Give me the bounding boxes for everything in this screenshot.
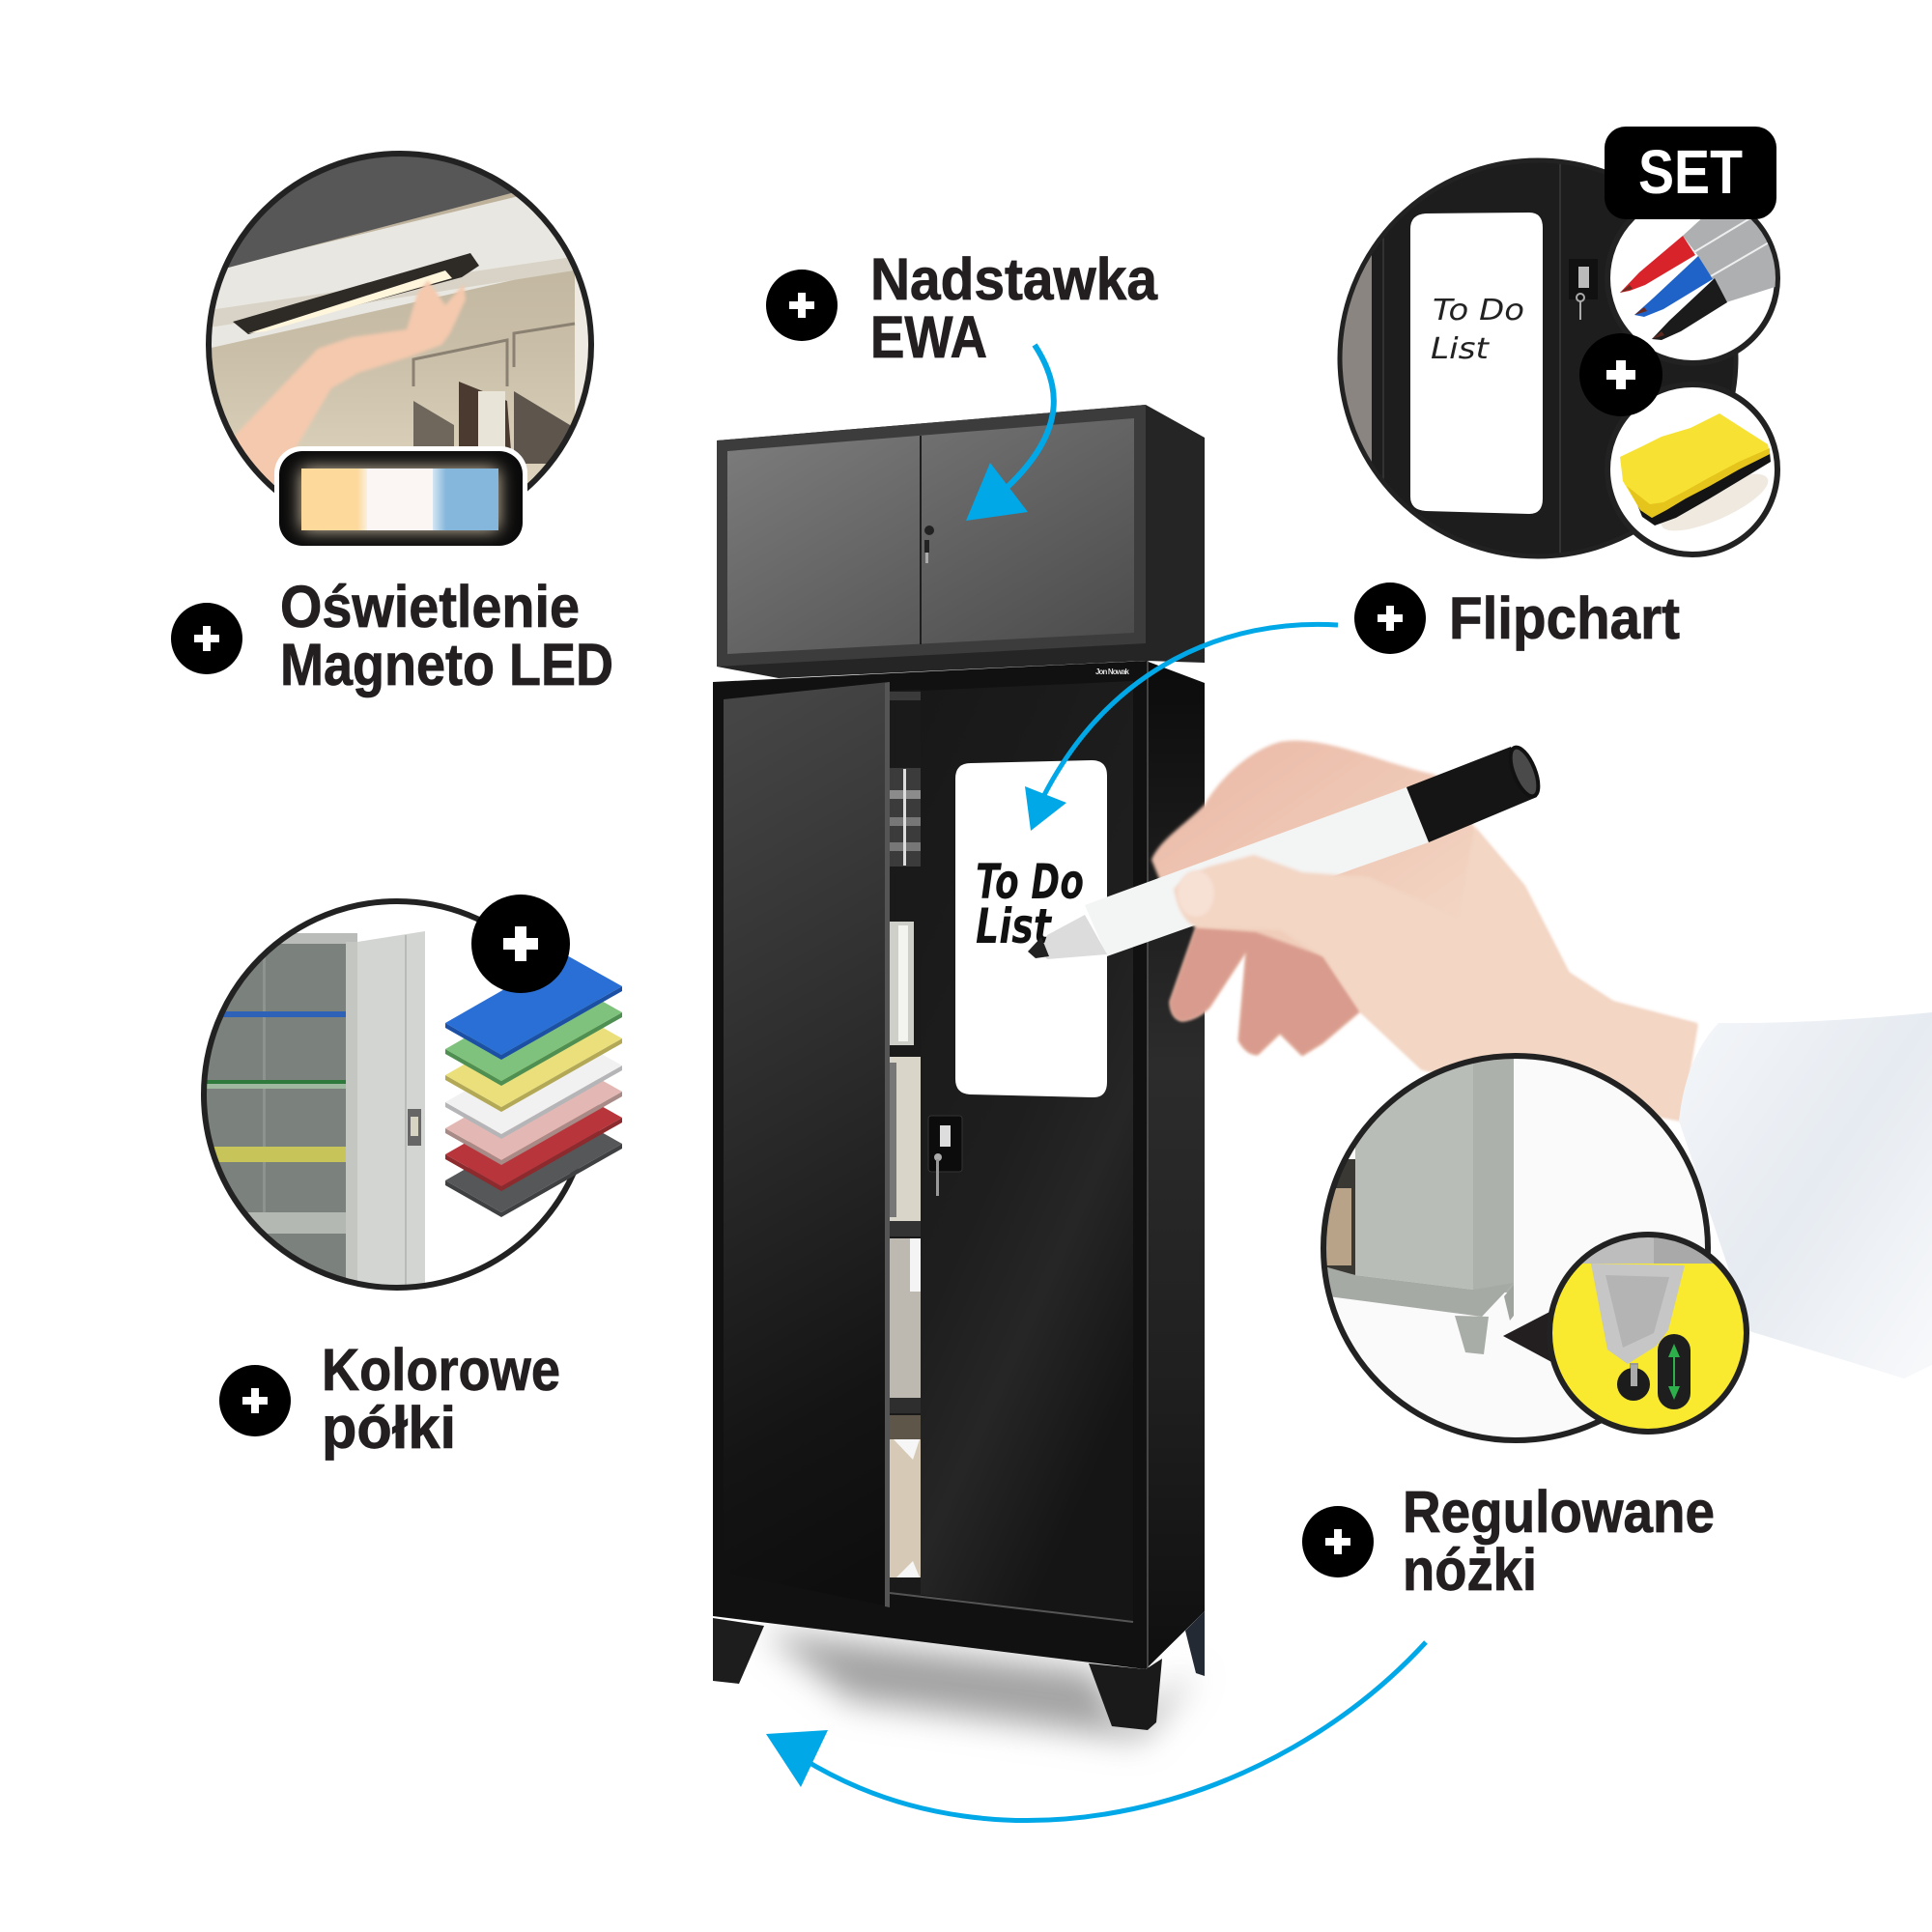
brand mark: Jon Nowak bbox=[1095, 668, 1130, 676]
colour temperature badge bbox=[274, 446, 527, 551]
SET badge: SET bbox=[1638, 137, 1743, 207]
label: coloured shelves bbox=[219, 1337, 560, 1461]
upper door divider bbox=[920, 436, 922, 644]
door lock bbox=[928, 1116, 962, 1196]
cabinet photo bbox=[198, 931, 425, 1294]
plus icon bbox=[1579, 333, 1662, 416]
mini whiteboard text: To Do bbox=[1433, 294, 1524, 327]
shelves circle outline bbox=[204, 901, 590, 1288]
hand with marker bbox=[1028, 741, 1697, 1121]
label text: Flipchart bbox=[1449, 585, 1680, 651]
zoom circle: foot bbox=[1546, 1227, 1750, 1432]
plus icon bbox=[171, 603, 242, 674]
SET badge bbox=[1605, 127, 1776, 219]
label: adjustable feet bbox=[1302, 1479, 1715, 1603]
marker tip bbox=[1028, 937, 1049, 958]
back leg bbox=[1185, 1611, 1205, 1676]
label text: Nadstawka bbox=[870, 246, 1158, 312]
mini lock bbox=[1569, 259, 1598, 320]
panel: coloured shelves bbox=[198, 895, 622, 1294]
mini whiteboard text bbox=[1431, 294, 1524, 366]
arrow: feet bbox=[766, 1642, 1426, 1820]
LED circle outline bbox=[209, 154, 591, 536]
cabinet bbox=[713, 405, 1205, 1730]
label text: Regulowane bbox=[1403, 1479, 1715, 1545]
marker body bbox=[1085, 787, 1429, 956]
label text: nóżki bbox=[1403, 1537, 1537, 1603]
handwritten to do list bbox=[976, 854, 1084, 954]
label text: Oświetlenie bbox=[280, 574, 580, 639]
arm sleeve bbox=[1679, 1012, 1932, 1378]
arm and hand bbox=[222, 280, 466, 487]
thumb and palm bbox=[1174, 828, 1697, 1121]
plus icon bbox=[219, 1365, 291, 1436]
lower fingers bbox=[1170, 927, 1360, 1056]
label text: Kolorowe bbox=[322, 1337, 560, 1403]
plus icon bbox=[1354, 582, 1426, 654]
feet circle fill bbox=[1323, 1056, 1708, 1440]
arrow: flipchart bbox=[1025, 624, 1338, 831]
cabinet corner photo bbox=[1314, 1053, 1514, 1354]
label text: Magneto LED bbox=[280, 632, 613, 697]
marker cap end bbox=[1505, 744, 1544, 800]
whiteboard on door bbox=[955, 760, 1107, 1097]
plus icon bbox=[1302, 1506, 1374, 1577]
panel: adjustable feet bbox=[1314, 1053, 1750, 1440]
right door bbox=[921, 681, 1133, 1621]
plus icon bbox=[471, 895, 570, 993]
panel: LED lighting bbox=[203, 145, 599, 551]
label: top unit bbox=[766, 246, 1158, 370]
right door bottom edge bbox=[890, 1593, 1133, 1622]
label: flipchart bbox=[1354, 582, 1680, 654]
feet circle outline bbox=[1323, 1056, 1708, 1440]
left open door bbox=[724, 682, 889, 1606]
cabinet shadow bbox=[763, 1631, 1198, 1739]
left leg bbox=[713, 1618, 764, 1684]
plus icon bbox=[766, 270, 838, 341]
label text bbox=[1403, 1479, 1715, 1603]
handwritten to do list: List bbox=[976, 898, 1053, 954]
marker cap bbox=[1406, 747, 1537, 842]
label text bbox=[870, 246, 1158, 370]
light bar bbox=[233, 253, 479, 334]
label text: EWA bbox=[870, 304, 987, 370]
height adjust pill bbox=[1658, 1334, 1690, 1409]
interior gap bbox=[890, 690, 921, 1596]
marker nib bbox=[1041, 915, 1107, 959]
panel: flipchart set bbox=[1337, 127, 1797, 563]
right front leg bbox=[1089, 1659, 1162, 1730]
upper unit side bbox=[717, 405, 1205, 678]
arrow: top unit bbox=[966, 345, 1054, 521]
lower cabinet front frame bbox=[713, 661, 1148, 1669]
mini whiteboard text: List bbox=[1431, 332, 1490, 366]
mini whiteboard bbox=[1410, 213, 1543, 514]
hand back bbox=[1151, 741, 1697, 1121]
photo: under-cabinet light bbox=[212, 156, 588, 485]
colour shelf stack bbox=[445, 954, 622, 1217]
thumbnail bbox=[1178, 870, 1214, 917]
upper lock bbox=[924, 526, 934, 563]
flipchart door photo bbox=[1337, 157, 1743, 563]
left door edge bbox=[885, 682, 890, 1607]
shelf racks bbox=[413, 324, 575, 386]
label: LED lighting bbox=[171, 574, 613, 697]
upper unit front frame bbox=[717, 405, 1146, 667]
upper doors bbox=[727, 418, 1134, 654]
eraser circle bbox=[1607, 384, 1777, 554]
handwritten to do list: To Do bbox=[976, 854, 1084, 910]
label text: półki bbox=[322, 1395, 456, 1461]
label text bbox=[280, 574, 613, 697]
flipchart circle outline bbox=[1340, 160, 1736, 556]
right frame line bbox=[1147, 661, 1149, 1669]
label text bbox=[322, 1337, 560, 1461]
markers circle bbox=[1610, 218, 1780, 360]
pointer triangle bbox=[1503, 1309, 1555, 1364]
lower cabinet side bbox=[1146, 661, 1205, 1669]
